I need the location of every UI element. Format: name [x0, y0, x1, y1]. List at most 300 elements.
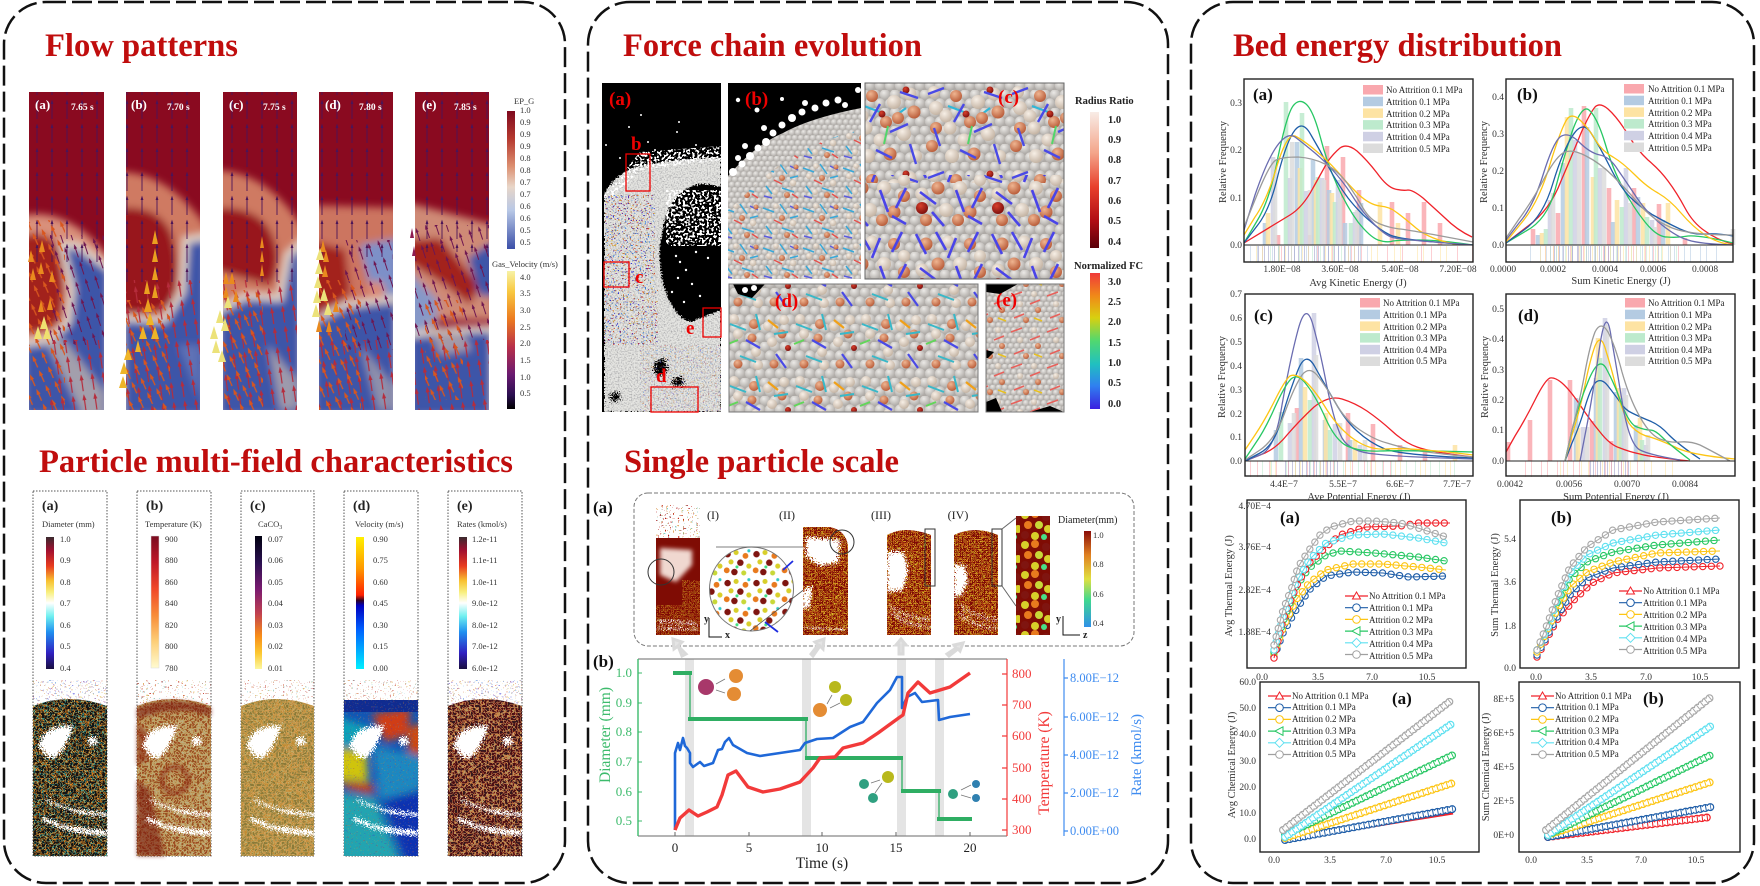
- chart: avg kinetic energy histogram: [1218, 79, 1477, 289]
- chart: avg chemical energy: 3.5: [1324, 856, 1336, 866]
- colorbar: EP_G: 0.9: [520, 141, 531, 151]
- chart: sum thermal energy: 5.4: [1504, 535, 1516, 545]
- chart: sum thermal energy: Attrition 0.2 MPa: [1643, 610, 1707, 620]
- chart: sum potential energy histogram: 0.0084: [1672, 480, 1698, 490]
- colorbar: normalized FC: 2.5: [1108, 297, 1121, 308]
- series: rate: [675, 677, 970, 830]
- field (b) temperature: 780: [165, 663, 178, 673]
- zoomed column: [1016, 516, 1050, 635]
- series: temperature: [675, 673, 970, 830]
- field (c) CaCO3: CaCO: [258, 519, 279, 529]
- chart: avg potential energy histogram: 7.7E−7: [1443, 480, 1471, 490]
- field (b) temperature: 880: [165, 555, 178, 565]
- colorbar: gas velocity: 0.5: [520, 388, 531, 398]
- field (e) rates: (e): [457, 499, 473, 514]
- field (c) CaCO3: (c): [250, 499, 266, 514]
- colorbar: gas velocity: 1.5: [520, 355, 531, 365]
- chart: avg thermal energy: 0.0: [1256, 673, 1268, 683]
- chart: sum potential energy histogram: Attrition 0.5 MPa: [1648, 356, 1712, 366]
- field (c) CaCO3: 0.04: [268, 598, 284, 608]
- field (e) rates: 8.0e-12: [472, 620, 498, 630]
- colorbar: EP_G: [507, 96, 534, 249]
- field (b) temperature: [137, 491, 211, 856]
- chart: avg potential energy histogram: 0.0: [1230, 457, 1242, 467]
- flow time labels: (e): [422, 97, 436, 112]
- chart: avg chemical energy: 0.0: [1244, 835, 1256, 845]
- force chain inset (e): (e): [996, 290, 1017, 311]
- chart: avg thermal energy: Attrition 0.5 MPa: [1369, 651, 1433, 661]
- field (a) diameter: (a): [42, 499, 59, 514]
- field (e) rates: 9.0e-12: [472, 598, 498, 608]
- flow panel (d) 7.80 s: [310, 92, 400, 420]
- title: Single particle scale: Single particle scale: [624, 444, 899, 480]
- field (c) CaCO3: 0.01: [268, 663, 283, 673]
- axis labels: 0.7: [616, 754, 632, 769]
- time series chart (b): [593, 652, 1145, 872]
- field (e) rates: 1.0e-11: [472, 577, 497, 587]
- chart: avg thermal energy: (a): [1280, 508, 1300, 527]
- colorbar: diameter: [1058, 515, 1117, 628]
- field (e) rates: 1.2e-11: [472, 534, 497, 544]
- axis labels: 600: [1012, 728, 1032, 743]
- field (b) temperature: 840: [165, 598, 178, 608]
- chart: sum potential energy histogram: Attrition 0.1 MPa: [1648, 310, 1712, 320]
- chart: avg potential energy histogram: Attrition 0.2 MPa: [1383, 322, 1447, 332]
- chart: avg potential energy histogram: 0.2: [1230, 410, 1242, 420]
- field (a) diameter: 0.4: [60, 663, 71, 673]
- flow time labels: 7.85 s: [454, 103, 477, 113]
- field (b) temperature: 900: [165, 534, 178, 544]
- chart: sum chemical energy: Attrition 0.3 MPa: [1555, 726, 1619, 736]
- chart: sum thermal energy: Attrition 0.1 MPa: [1643, 598, 1707, 608]
- chart: sum potential energy histogram: 0.0056: [1556, 480, 1582, 490]
- gray arrows to snapshots: [673, 639, 963, 656]
- chart: sum chemical energy: 2E+5: [1493, 797, 1514, 807]
- chart: avg thermal energy: Attrition 0.3 MPa: [1369, 627, 1433, 637]
- chart: sum thermal energy: [1490, 500, 1739, 683]
- field (c) CaCO3: [241, 491, 315, 856]
- snapshot (II): [803, 527, 854, 635]
- chart: avg kinetic energy histogram: Attrition 0.4 MPa: [1386, 132, 1450, 142]
- colorbar: gas velocity: [492, 259, 558, 409]
- flow time labels: (a): [35, 97, 50, 112]
- colorbar: radius ratio: 0.4: [1108, 237, 1122, 248]
- axes glyphs: y: [1056, 614, 1061, 625]
- colorbar: EP_G: 0.9: [520, 117, 531, 127]
- axis labels: 1.0: [616, 665, 632, 680]
- field (c) CaCO3: 0.05: [268, 577, 283, 587]
- chart: avg chemical energy: 50.0: [1239, 704, 1256, 714]
- field (e) rates: Rates (kmol/s): [457, 519, 507, 529]
- colorbar: radius ratio: 0.7: [1108, 176, 1121, 187]
- axis labels: 5: [746, 840, 752, 855]
- flow time labels: [35, 97, 477, 113]
- force chain overview (a): [602, 83, 721, 412]
- chart: sum kinetic energy histogram: 0.0008: [1692, 265, 1718, 275]
- chart: sum thermal energy: 7.0: [1640, 673, 1652, 683]
- chart: sum chemical energy: (b): [1643, 689, 1664, 708]
- chart: avg potential energy histogram: 0.5: [1230, 338, 1242, 348]
- axis labels: 15: [890, 840, 902, 855]
- colorbar: EP_G: 0.5: [520, 225, 531, 235]
- colorbar: normalized FC: 1.0: [1108, 358, 1121, 369]
- chart: sum potential energy histogram: Attrition 0.4 MPa: [1648, 345, 1712, 355]
- colorbar: normalized FC: 3.0: [1108, 277, 1121, 288]
- flow panel (e) 7.85 s: [405, 92, 495, 420]
- chart: sum kinetic energy histogram: Sum Kinetic Energy (J): [1571, 276, 1671, 287]
- field (a) diameter: 0.9: [60, 555, 71, 565]
- single particle snapshots: (II): [779, 508, 795, 522]
- force chain inset (b): (b): [745, 89, 768, 110]
- field (d) velocity: 0.15: [373, 641, 388, 651]
- chart: sum potential energy histogram: 0.2: [1492, 396, 1504, 406]
- chart: sum kinetic energy histogram: 0.0: [1492, 241, 1504, 251]
- chart: sum thermal energy: 10.5: [1692, 673, 1709, 683]
- chart: sum kinetic energy histogram: 0.0006: [1640, 265, 1666, 275]
- gray phase bands: [685, 659, 944, 836]
- force chain inset (c): [865, 83, 1064, 279]
- chart: avg thermal energy: 1.88E−4: [1238, 628, 1271, 638]
- axis labels: 4.00E−12: [1070, 748, 1119, 762]
- single particle snapshots: (IV): [948, 508, 968, 522]
- chart: avg chemical energy: 7.0: [1380, 856, 1392, 866]
- chart: avg kinetic energy histogram: 3.60E−08: [1321, 265, 1359, 275]
- chart: avg chemical energy: No Attrition 0.1 MPa: [1292, 691, 1369, 701]
- chart: avg potential energy histogram: Attrition 0.3 MPa: [1383, 333, 1447, 343]
- chart: sum potential energy histogram: [1480, 294, 1735, 503]
- chart: avg chemical energy: Attrition 0.3 MPa: [1292, 726, 1356, 736]
- axis labels: 20: [964, 840, 976, 855]
- chart: avg potential energy histogram: [1217, 290, 1473, 503]
- chart: sum chemical energy: 0.0: [1525, 856, 1537, 866]
- chart: avg kinetic energy histogram: (a): [1253, 85, 1273, 104]
- colorbar: diameter: 0.4: [1093, 618, 1104, 628]
- colorbar: gas velocity: Gas_Velocity (m/s): [492, 259, 558, 269]
- chart: avg chemical energy: Attrition 0.2 MPa: [1292, 714, 1356, 724]
- chart: avg potential energy histogram: 0.6: [1230, 314, 1242, 324]
- axes glyphs: z: [1083, 630, 1088, 641]
- force chain overview (a): (a): [609, 89, 631, 110]
- chart: sum kinetic energy histogram: (b): [1517, 85, 1538, 104]
- snapshot (IV): [954, 518, 1016, 635]
- colorbar: EP_G: EP_G: [514, 96, 534, 106]
- axis labels: 0.8: [616, 724, 632, 739]
- chart: sum potential energy histogram: 0.5: [1492, 305, 1504, 315]
- axis labels: [616, 665, 1119, 855]
- chart: sum kinetic energy histogram: 0.3: [1492, 130, 1504, 140]
- flow time labels: (d): [325, 97, 341, 112]
- red inset boxes: [604, 154, 721, 412]
- title: Bed energy distribution: Bed energy distribution: [1233, 28, 1562, 64]
- title: Flow patterns: Flow patterns: [45, 28, 238, 64]
- chart: avg potential energy histogram: Attrition 0.1 MPa: [1383, 310, 1447, 320]
- chart: avg chemical energy: Avg Chemical Energy (J): [1227, 711, 1238, 818]
- chart: avg chemical energy: Attrition 0.5 MPa: [1292, 749, 1356, 759]
- panel: force chains and single particle: [588, 2, 1168, 883]
- chart: avg kinetic energy histogram: 0.0: [1230, 241, 1242, 251]
- chart: avg potential energy histogram: 0.4: [1230, 362, 1242, 372]
- title: Particle multi-field characteristics: Particle multi-field characteristics: [39, 444, 513, 480]
- chart: sum kinetic energy histogram: No Attrition 0.1 MPa: [1648, 84, 1725, 94]
- chart: sum thermal energy: 3.6: [1504, 578, 1516, 588]
- axis labels: 2.00E−12: [1070, 786, 1119, 800]
- chart: avg thermal energy: [1224, 500, 1466, 683]
- colorbar: diameter: 0.8: [1093, 559, 1104, 569]
- colorbar: EP_G: 0.7: [520, 177, 531, 187]
- chart: avg potential energy histogram: Ave Potential Energy (J): [1307, 492, 1411, 503]
- colorbar: normalized FC: 0.0: [1108, 399, 1121, 410]
- chart: avg thermal energy: Attrition 0.1 MPa: [1369, 603, 1433, 613]
- chart: sum thermal energy: Attrition 0.5 MPa: [1643, 646, 1707, 656]
- chart: avg thermal energy: 3.5: [1312, 673, 1324, 683]
- axes glyphs: x: [725, 630, 730, 641]
- field (b) temperature: 860: [165, 577, 178, 587]
- chart: sum thermal energy: No Attrition 0.1 MPa: [1643, 586, 1720, 596]
- field (d) velocity: 0.90: [373, 534, 388, 544]
- snapshot (III): [887, 529, 935, 635]
- field (d) velocity: [335, 491, 425, 866]
- colorbar: radius ratio: Radius Ratio: [1075, 96, 1134, 107]
- colorbar: gas velocity: 1.0: [520, 372, 531, 382]
- field (d) velocity: 0.60: [373, 577, 388, 587]
- colorbar: gas velocity: 4.0: [520, 272, 531, 282]
- chart: sum chemical energy: 8E+5: [1493, 695, 1514, 705]
- chart: sum potential energy histogram: (d): [1518, 306, 1539, 325]
- panel: flow patterns and particle fields: [4, 2, 565, 883]
- panel: bed energy distribution: [1191, 2, 1754, 883]
- chart: sum potential energy histogram: 0.0: [1492, 457, 1504, 467]
- time series chart (b): Rate (kmol/s): [1129, 714, 1145, 796]
- axis labels: 0.5: [616, 813, 632, 828]
- chart: sum thermal energy: 0.0: [1504, 664, 1516, 674]
- axis labels: 500: [1012, 760, 1032, 775]
- flow time labels: 7.75 s: [263, 103, 286, 113]
- field (d) velocity: (d): [353, 499, 370, 514]
- chart: sum thermal energy: Attrition 0.3 MPa: [1643, 622, 1707, 632]
- field (d) velocity: 0.45: [373, 598, 388, 608]
- colorbar: gas velocity: 2.5: [520, 322, 531, 332]
- axis labels: 0.9: [616, 695, 632, 710]
- field (d) velocity: 0.30: [373, 620, 388, 630]
- field (d) velocity: Velocity (m/s): [355, 519, 404, 529]
- colorbar: EP_G: 0.9: [520, 129, 531, 139]
- chart: avg potential energy histogram: Relative Frequency: [1217, 335, 1228, 418]
- chart: sum kinetic energy histogram: Attrition 0.5 MPa: [1648, 143, 1712, 153]
- chart: avg chemical energy: 60.0: [1239, 678, 1256, 688]
- axis labels: 300: [1012, 822, 1032, 837]
- field (a) diameter: 0.7: [60, 598, 71, 608]
- field (e) rates: 1.1e-11: [472, 555, 497, 565]
- chart: sum potential energy histogram: No Attrition 0.1 MPa: [1648, 298, 1725, 308]
- axis labels: 10: [816, 840, 828, 855]
- force chain inset (b): [728, 83, 861, 279]
- field (c) CaCO3: 0.03: [268, 620, 283, 630]
- chart: avg thermal energy: 7.0: [1366, 673, 1378, 683]
- chart: sum chemical energy: Attrition 0.4 MPa: [1555, 737, 1619, 747]
- chart: avg potential energy histogram: 0.3: [1230, 386, 1242, 396]
- chart: sum chemical energy: 4E+5: [1493, 763, 1514, 773]
- field (a) diameter: 0.6: [60, 620, 71, 630]
- chart: sum kinetic energy histogram: [1479, 79, 1733, 287]
- chart: avg chemical energy: 10.0: [1239, 809, 1256, 819]
- chart: avg chemical energy: 10.5: [1429, 856, 1446, 866]
- field (b) temperature: (b): [146, 499, 163, 514]
- chart: avg potential energy histogram: 5.5E−7: [1329, 480, 1357, 490]
- axis labels: 0.6: [616, 784, 632, 799]
- chart: avg chemical energy: (a): [1392, 689, 1412, 708]
- axis labels: 700: [1012, 697, 1032, 712]
- chart: avg thermal energy: Avg Thermal Energy (J): [1224, 535, 1235, 637]
- field (e) rates: 6.0e-12: [472, 663, 498, 673]
- colorbar: EP_G: 0.7: [520, 189, 531, 199]
- chart: avg chemical energy: 20.0: [1239, 783, 1256, 793]
- axis labels: 800: [1012, 666, 1032, 681]
- colorbar: gas velocity: 2.0: [520, 338, 531, 348]
- time series chart (b): Time (s): [796, 855, 848, 872]
- colorbar: diameter: 1.0: [1093, 530, 1104, 540]
- colorbar: EP_G: 0.6: [520, 213, 531, 223]
- chart: avg kinetic energy histogram: Attrition 0.1 MPa: [1386, 97, 1450, 107]
- axis labels: 0.00E+00: [1070, 824, 1119, 838]
- chart: sum potential energy histogram: Relative Frequency: [1480, 335, 1491, 418]
- time series chart (b): (b): [593, 652, 614, 671]
- chart: sum kinetic energy histogram: 0.0002: [1540, 265, 1566, 275]
- force chain inset (c): (c): [998, 87, 1019, 108]
- colorbar: normalized FC: 2.0: [1108, 317, 1121, 328]
- colorbar: radius ratio: 0.9: [1108, 135, 1121, 146]
- chart: sum potential energy histogram: Sum Potential Energy (J): [1563, 492, 1669, 503]
- flow panel (a) 7.65 s: [20, 92, 112, 420]
- chart: sum potential energy histogram: 0.4: [1492, 335, 1504, 345]
- flow time labels: (c): [229, 97, 243, 112]
- chart: avg thermal energy: No Attrition 0.1 MPa: [1369, 591, 1446, 601]
- field (c) CaCO3: 3: [279, 525, 282, 531]
- chart: avg kinetic energy histogram: 1.80E−08: [1263, 265, 1301, 275]
- chart: avg chemical energy: Attrition 0.4 MPa: [1292, 737, 1356, 747]
- force chain overview (a): c: [635, 267, 643, 288]
- axis labels: 400: [1012, 791, 1032, 806]
- chart: sum chemical energy: 3.5: [1581, 856, 1593, 866]
- chart: sum chemical energy: Attrition 0.1 MPa: [1555, 702, 1619, 712]
- title: Force chain evolution: Force chain evolution: [623, 28, 922, 64]
- chart: avg potential energy histogram: Attrition 0.4 MPa: [1383, 345, 1447, 355]
- chart: avg kinetic energy histogram: Attrition 0.3 MPa: [1386, 120, 1450, 130]
- chart: sum chemical energy: [1481, 682, 1740, 866]
- time series chart (b): Temperature (K): [1036, 711, 1053, 815]
- chart: sum kinetic energy histogram: Attrition 0.3 MPa: [1648, 119, 1712, 129]
- chart: avg chemical energy: 30.0: [1239, 757, 1256, 767]
- field (a) diameter: [33, 491, 107, 856]
- time series chart (b): Diameter (mm): [597, 687, 614, 783]
- chart: sum chemical energy: Attrition 0.2 MPa: [1555, 714, 1619, 724]
- chart: sum potential energy histogram: Attrition 0.2 MPa: [1648, 322, 1712, 332]
- field (c) CaCO3: 0.02: [268, 641, 283, 651]
- field (a) diameter: 1.0: [60, 534, 71, 544]
- field (e) rates: [448, 491, 522, 856]
- chart: avg thermal energy: 10.5: [1419, 673, 1436, 683]
- chart: avg thermal energy: 4.70E−4: [1238, 502, 1271, 512]
- flow panel (c) 7.75 s: [210, 92, 305, 420]
- chart: avg kinetic energy histogram: 5.40E−08: [1381, 265, 1419, 275]
- series: diameter: [673, 673, 972, 819]
- chart: avg potential energy histogram: 0.1: [1230, 433, 1242, 443]
- chart: sum kinetic energy histogram: 0.0004: [1592, 265, 1618, 275]
- chart: avg kinetic energy histogram: 0.1: [1230, 194, 1242, 204]
- chart: avg potential energy histogram: 6.6E−7: [1386, 480, 1414, 490]
- chart: sum chemical energy: No Attrition 0.1 MPa: [1555, 691, 1632, 701]
- chart: sum potential energy histogram: 0.0042: [1497, 480, 1523, 490]
- chart: avg thermal energy: Attrition 0.2 MPa: [1369, 615, 1433, 625]
- chart: sum chemical energy: Attrition 0.5 MPa: [1555, 749, 1619, 759]
- chart: avg chemical energy: 0.0: [1268, 856, 1280, 866]
- chart: avg potential energy histogram: 0.7: [1230, 290, 1242, 300]
- chart: sum kinetic energy histogram: Relative Frequency: [1479, 120, 1490, 203]
- colorbar: normalized FC: 1.5: [1108, 338, 1121, 349]
- chart: avg chemical energy: Attrition 0.1 MPa: [1292, 702, 1356, 712]
- single particle snapshots: (III): [871, 508, 891, 522]
- colorbar: EP_G: 0.8: [520, 153, 531, 163]
- field (c) CaCO3: 0.07: [268, 534, 283, 544]
- chart: sum potential energy histogram: Attrition 0.3 MPa: [1648, 333, 1712, 343]
- chart: avg chemical energy: 40.0: [1239, 730, 1256, 740]
- force chain inset (d): (d): [775, 291, 798, 312]
- axis labels: 0: [672, 840, 678, 855]
- force chain inset (d): [729, 284, 978, 412]
- colorbar: EP_G: 0.6: [520, 201, 531, 211]
- chart: avg potential energy histogram: Attrition 0.5 MPa: [1383, 356, 1447, 366]
- flow time labels: 7.70 s: [167, 103, 190, 113]
- axis labels: 8.00E−12: [1070, 671, 1119, 685]
- chart: sum potential energy histogram: 0.3: [1492, 366, 1504, 376]
- force chain overview (a): d: [656, 366, 667, 387]
- chart: sum thermal energy: 0.0: [1530, 673, 1542, 683]
- colorbar: EP_G: 0.5: [520, 237, 531, 247]
- chart: sum thermal energy: 3.5: [1585, 673, 1597, 683]
- field (b) temperature: 820: [165, 620, 178, 630]
- field (a) diameter: 0.8: [60, 577, 71, 587]
- chart: avg chemical energy: [1227, 678, 1479, 866]
- chart: sum chemical energy: Sum Chemical Energy (J): [1481, 712, 1492, 821]
- single particle snapshots: (a): [593, 498, 613, 517]
- chart: avg potential energy histogram: No Attrition 0.1 MPa: [1383, 298, 1460, 308]
- chart: avg kinetic energy histogram: Attrition 0.2 MPa: [1386, 109, 1450, 119]
- field (d) velocity: 0.75: [373, 555, 388, 565]
- field (b) temperature: 800: [165, 641, 178, 651]
- colorbar: EP_G: 1.0: [520, 105, 531, 115]
- chart: sum kinetic energy histogram: 0.0000: [1490, 265, 1516, 275]
- colorbar: gas velocity: 3.5: [520, 288, 531, 298]
- chart: avg kinetic energy histogram: Relative Frequency: [1218, 120, 1229, 203]
- chart: sum kinetic energy histogram: Attrition 0.2 MPa: [1648, 108, 1712, 118]
- colorbar: EP_G: 0.8: [520, 165, 531, 175]
- chart: avg thermal energy: 2.82E−4: [1238, 586, 1271, 596]
- colorbar: radius ratio: 0.6: [1108, 196, 1121, 207]
- axes glyphs: y: [704, 614, 709, 625]
- field (a) diameter: Diameter (mm): [42, 519, 95, 529]
- chart: sum chemical energy: 7.0: [1635, 856, 1647, 866]
- flow panel (b) 7.70 s: [119, 92, 210, 420]
- chart: sum potential energy histogram: 0.1: [1492, 426, 1504, 436]
- colorbar: gas velocity: 3.0: [520, 305, 531, 315]
- field (e) rates: 7.0e-12: [472, 641, 498, 651]
- chart: sum kinetic energy histogram: 0.2: [1492, 167, 1504, 177]
- chart: avg thermal energy: 3.76E−4: [1238, 543, 1271, 553]
- chart: avg kinetic energy histogram: 0.2: [1230, 146, 1242, 156]
- axes glyphs: [704, 614, 1088, 641]
- magnified circle: [710, 547, 810, 632]
- chart: avg kinetic energy histogram: 7.20E−08: [1439, 265, 1477, 275]
- chart: avg kinetic energy histogram: Avg Kinetic Energy (J): [1309, 278, 1407, 289]
